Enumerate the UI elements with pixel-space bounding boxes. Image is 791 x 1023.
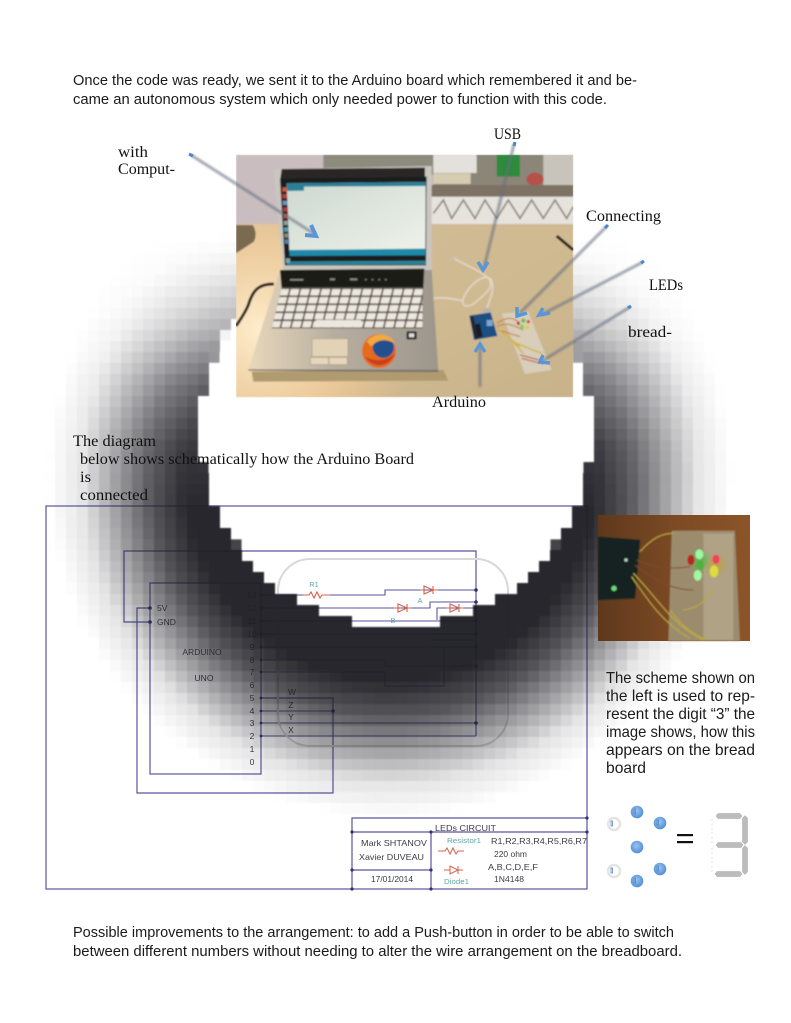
dark pixelated vignette ring (56, 253, 725, 804)
schematic labels: Xavier DUVEAU (359, 852, 424, 862)
LEDs (687, 555, 695, 565)
right explanatory text: The scheme shown on (606, 670, 755, 687)
schematic labels: 17/01/2014 (371, 874, 413, 884)
schematic labels: LEDs CIRCUIT (435, 823, 496, 833)
diagram intro text: connected (80, 487, 148, 504)
photo labels: Connecting (586, 208, 661, 225)
screen (280, 177, 427, 265)
glow (691, 551, 708, 569)
schematic labels: 2 (250, 731, 255, 741)
arduino board box (150, 583, 261, 774)
photo labels: LEDs (649, 277, 683, 294)
equals sign (677, 834, 693, 843)
diagram intro text: is (80, 469, 91, 486)
schematic labels: W (288, 687, 296, 697)
launcher icons (282, 187, 290, 263)
outer frame (46, 506, 587, 889)
intro paragraph: Once the code was ready, we sent it to the Arduino board which remembered it and be- (73, 72, 637, 89)
schematic labels: 6 (250, 680, 255, 690)
USB cable (433, 256, 493, 309)
arrow: USB (478, 142, 515, 270)
laptop lid (273, 166, 432, 271)
schematic labels: R1,R2,R3,R4,R5,R6,R7 (491, 836, 587, 846)
right explanatory text: image shows, how this (606, 724, 755, 741)
arrow: breadboard (540, 306, 631, 363)
title block lines (352, 818, 587, 889)
photo labels: USB (494, 126, 521, 143)
schematic labels: 11 (248, 616, 257, 626)
right explanatory text (606, 670, 755, 777)
schematic labels: 220 ohm (494, 849, 527, 859)
power cable (236, 284, 274, 326)
title block symbols (438, 848, 464, 874)
schematic labels: 8 (250, 655, 255, 665)
schematic labels: 3 (250, 718, 255, 728)
intro paragraph: came an autonomous system which only needed power to function with this code. (73, 91, 607, 108)
5V wire loop (137, 608, 333, 793)
schematic labels: A,B,C,D,E,F (488, 862, 538, 872)
schematic labels: X (288, 725, 294, 735)
arrow: Arduino (475, 344, 485, 387)
laptop shadow (252, 370, 448, 382)
breadboard (668, 531, 740, 641)
schematic labels (157, 580, 587, 886)
schematic labels: 0 (250, 757, 255, 767)
photo labels: with (118, 144, 148, 161)
photo labels: Comput- (118, 161, 175, 178)
resistor and diodes (303, 586, 464, 612)
LED state diagram (608, 806, 666, 887)
diagram intro text (73, 433, 414, 504)
photo: laptop with Arduino and breadboard (236, 155, 573, 397)
schematic labels: 7 (250, 667, 255, 677)
schematic labels: 9 (250, 642, 255, 652)
arrow: connecting (517, 225, 608, 316)
schematic labels: Diode1 (444, 877, 469, 886)
hinge and top deck (280, 269, 424, 289)
schematic labels: ARDUINO (182, 647, 222, 657)
intro paragraph (73, 72, 637, 108)
arrows pointing to photo details (189, 142, 644, 387)
arrow: LEDs (539, 261, 644, 315)
schematic labels: A (417, 596, 423, 605)
right explanatory text: resent the digit “3” the (606, 706, 755, 723)
schematic labels: Y (288, 712, 294, 722)
yellow wires (632, 533, 713, 640)
Arduino board (469, 308, 497, 340)
schematic labels: 13 (247, 590, 257, 600)
connection dots (148, 588, 478, 737)
breadboard (497, 312, 552, 374)
pin wires (261, 590, 476, 736)
ground wire loop (124, 551, 476, 736)
diagram intro text: The diagram (73, 433, 157, 450)
photo labels: Arduino (432, 394, 486, 411)
photo: lit LEDs on breadboard (598, 515, 750, 641)
touchpad (312, 339, 348, 357)
schematic labels: Resistor1 (447, 836, 481, 845)
soldering iron (557, 236, 573, 250)
fingerprint reader (407, 331, 417, 339)
schematic labels: GND (157, 617, 176, 627)
improvements paragraph: Possible improvements to the arrangement: to add a Push-button in order to be able to switch (73, 924, 674, 941)
photo labels: bread- (628, 324, 672, 341)
schematic labels: 1N4148 (494, 874, 524, 884)
photo labels (118, 126, 683, 411)
schematic labels: R1 (309, 580, 319, 589)
schematic labels: Mark SHTANOV (361, 838, 427, 848)
schematic labels: 5 (250, 693, 255, 703)
right explanatory text: the left is used to rep- (606, 688, 755, 705)
schematic labels: 12 (247, 603, 257, 613)
right explanatory text: board (606, 760, 646, 777)
schematic labels: 10 (247, 629, 257, 639)
schematic labels: UNO (195, 673, 214, 683)
desk surface (236, 224, 573, 397)
firefox sticker (362, 334, 396, 368)
wall and shelf (236, 154, 434, 225)
schematic labels: 4 (250, 706, 255, 716)
schematic labels: 1 (250, 744, 255, 754)
circuit schematic (46, 506, 589, 891)
schematic labels: Z (288, 700, 294, 710)
keyboard (272, 287, 423, 328)
improvements paragraph (73, 924, 682, 960)
seven-segment digit 3 (712, 814, 748, 876)
arrow: computer (189, 154, 316, 236)
grey component outline (278, 559, 508, 746)
right explanatory text: appears on the bread (606, 742, 755, 759)
Arduino in the dark (598, 537, 640, 600)
laptop base (248, 270, 438, 371)
improvements paragraph: between different numbers without needing to alter the wire arrangement on the breadboard. (73, 943, 682, 960)
diagram intro text: below shows schematically how the Arduino Board (80, 451, 414, 468)
schematic labels: 5V (157, 603, 168, 613)
schematic labels: B (390, 616, 396, 625)
